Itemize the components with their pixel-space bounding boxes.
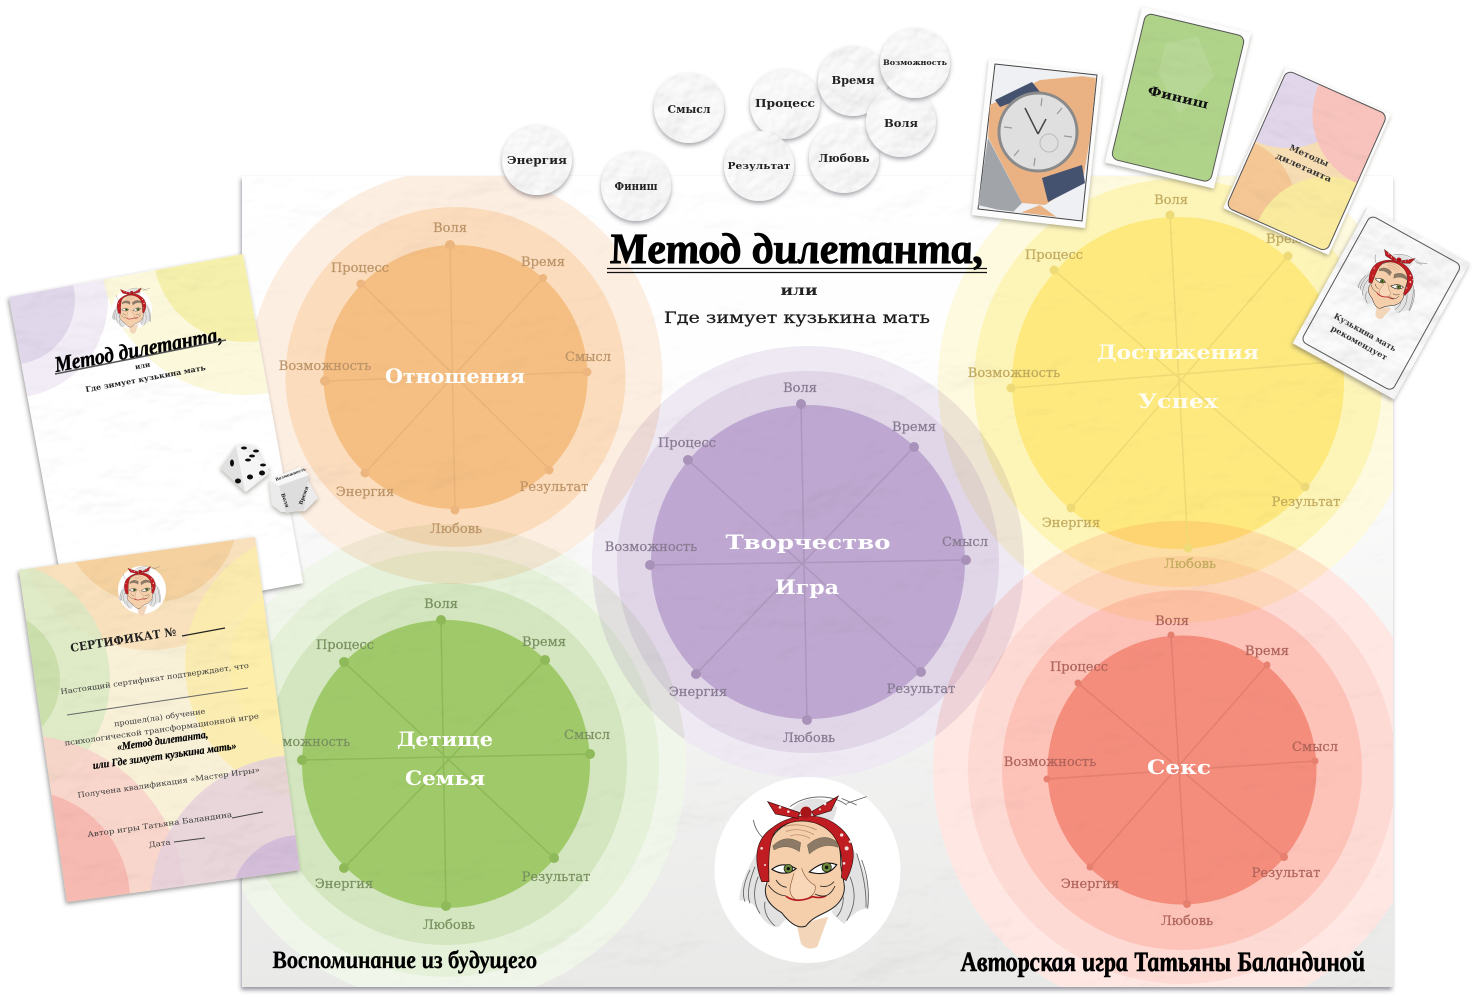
card: methods: Методы xyxy=(1288,143,1330,170)
wheel: Творчество Игра xyxy=(605,381,988,746)
wheel: Секс: Смысл xyxy=(1292,740,1338,755)
wheel: Отношения: Время xyxy=(521,255,565,270)
wheel: Детище Семья: Возможность xyxy=(258,735,350,750)
certificate body: или Где зимует кузькина мать» xyxy=(92,740,237,772)
game token: Смысл: Смысл xyxy=(668,102,710,116)
wheel: Творчество Игра: Смысл xyxy=(942,535,988,550)
certificate body: «Метод дилетанта, xyxy=(116,729,209,753)
game token: Возможность: Возможность xyxy=(883,58,947,67)
title: Где зимует кузькина мать xyxy=(664,308,930,327)
wheel: Творчество Игра: Энергия xyxy=(669,685,727,700)
dice: black pips xyxy=(220,444,270,492)
circle: creativity rings xyxy=(592,346,1024,778)
wheel: Отношения: Энергия xyxy=(336,485,394,500)
game token: Время: Время xyxy=(832,73,875,87)
wheel: Творчество Игра: Процесс xyxy=(658,436,716,451)
certificate portrait xyxy=(118,566,166,616)
footer text left: Воспоминание из будущего xyxy=(269,947,539,974)
dice: word faces: Возможность xyxy=(275,466,307,482)
title: или xyxy=(780,283,818,299)
game token: Процесс: Процесс xyxy=(755,96,815,110)
certificate body: Получена квалификация «Мастер Игры» xyxy=(77,765,261,800)
game token: Возможность xyxy=(880,28,950,98)
certificate body: Настоящий сертификат подтверждает, что xyxy=(60,661,250,696)
wheel: Достижения Успех: Любовь xyxy=(1164,557,1216,572)
wheel: Достижения Успех: Воля xyxy=(1154,193,1188,208)
wheel: Отношения: Смысл xyxy=(565,350,611,365)
wheel: Детище Семья: Детище xyxy=(397,728,493,751)
game token: Любовь xyxy=(809,123,879,193)
wheel: Детище Семья: Результат xyxy=(522,870,590,885)
wheel: Творчество Игра: Игра xyxy=(775,576,839,599)
certificate body: психологической трансформационной игре xyxy=(64,711,260,748)
game token: Процесс xyxy=(750,69,820,139)
game token: Время xyxy=(818,46,888,116)
booklet portrait xyxy=(112,288,152,334)
certificate xyxy=(16,536,302,906)
wheel: Детище Семья: Воля xyxy=(424,597,458,612)
wheel: Детище Семья: Смысл xyxy=(564,728,610,743)
booklet heading: или xyxy=(134,360,151,371)
wheel: Секс: Результат xyxy=(1252,866,1320,881)
certificate body: Автор игры Татьяна Баландина xyxy=(87,810,233,839)
wheel: Достижения Успех: Энергия xyxy=(1042,516,1100,531)
wheel: Секс: Любовь xyxy=(1161,914,1213,929)
wheel: Детище Семья: Процесс xyxy=(316,638,374,653)
certificate body xyxy=(60,661,263,850)
wheel: Достижения Успех: Время xyxy=(1266,232,1310,247)
game token: Любовь: Любовь xyxy=(818,151,870,165)
title: Метод дилетанта, xyxy=(605,225,986,273)
certificate body: Дата xyxy=(148,837,172,850)
game token: Воля xyxy=(866,87,936,157)
wheel: Творчество Игра: Возможность xyxy=(605,540,697,555)
wheel: Детище Семья: Любовь xyxy=(423,918,475,933)
card: Kuzkina mother recommends: Кузькина мать xyxy=(1332,311,1399,354)
card: finish xyxy=(1105,7,1251,189)
circle: sex rings xyxy=(933,521,1431,987)
wheel: Достижения Успех: Результат xyxy=(1272,495,1340,510)
wheel: Отношения: Воля xyxy=(433,221,467,236)
footer text right: Авторская игра Татьяны Баландиной xyxy=(957,947,1367,978)
rules booklet cover xyxy=(6,254,320,596)
game token: Энергия xyxy=(502,125,572,195)
wheel: Достижения Успех: Смысл xyxy=(1320,339,1366,354)
circle: relationships rings xyxy=(248,170,662,584)
wheel: Секс xyxy=(1004,614,1338,929)
booklet heading: Метод дилетанта, xyxy=(51,321,224,377)
certificate heading: СЕРТИФИКАТ № xyxy=(69,624,177,655)
wheel: Достижения Успех: Достижения xyxy=(1097,341,1259,364)
dice: word faces: Время xyxy=(298,486,310,506)
wheel: Достижения Успех xyxy=(968,193,1366,572)
game token: Результат: Результат xyxy=(728,161,791,172)
wheel: Достижения Успех: Успех xyxy=(1138,390,1218,413)
wheel: Детище Семья xyxy=(258,597,610,933)
booklet heading xyxy=(51,321,226,394)
game board xyxy=(206,143,1431,987)
game token: Воля: Воля xyxy=(884,116,918,130)
wheel: Секс: Процесс xyxy=(1050,660,1108,675)
wheel: Творчество Игра: Воля xyxy=(783,381,817,396)
certificate body: прошел(ла) обучение xyxy=(113,707,206,728)
game token: Энергия: Энергия xyxy=(507,153,568,167)
wheel: Достижения Успех: Процесс xyxy=(1025,248,1083,263)
card: Kuzkina mother recommends xyxy=(1293,207,1470,399)
wheel: Отношения: Отношения xyxy=(385,365,525,388)
title xyxy=(605,225,987,327)
wheel: Творчество Игра: Любовь xyxy=(783,731,835,746)
wheel: Детище Семья: Энергия xyxy=(315,877,373,892)
wheel: Детище Семья: Время xyxy=(522,635,566,650)
wheel: Детище Семья: Семья xyxy=(405,767,485,790)
dice: word faces xyxy=(269,466,318,513)
wheel: Отношения: Возможность xyxy=(279,359,371,374)
dice: word faces: Воля xyxy=(279,493,290,509)
wheel: Секс: Возможность xyxy=(1004,755,1096,770)
wheel: Секс: Энергия xyxy=(1061,877,1119,892)
wheel: Достижения Успех: Возможность xyxy=(968,366,1060,381)
card: wristwatch xyxy=(972,59,1102,228)
wheel: Творчество Игра: Время xyxy=(892,420,936,435)
circle: child/family rings xyxy=(206,524,686,987)
wheel: Отношения xyxy=(279,221,611,537)
wheel: Секс: Воля xyxy=(1155,614,1189,629)
game token: Финиш xyxy=(601,151,671,221)
game token: Смысл xyxy=(654,73,724,143)
wheel: Отношения: Процесс xyxy=(331,261,389,276)
card: finish: Финиш xyxy=(1146,83,1211,112)
game token: Результат xyxy=(724,131,794,201)
card: methods xyxy=(1221,68,1392,258)
card: methods: дилетанта xyxy=(1274,151,1333,185)
card: Kuzkina mother recommends: рекомендует xyxy=(1329,323,1389,362)
circle: achievement rings xyxy=(938,176,1393,623)
game token: Финиш: Финиш xyxy=(614,179,658,193)
wheel: Творчество Игра: Результат xyxy=(887,682,955,697)
booklet heading: Где зимует кузькина мать xyxy=(85,363,206,394)
wheel: Творчество Игра: Творчество xyxy=(726,531,890,554)
portrait: Kuzkina mother xyxy=(714,777,900,963)
wheel: Отношения: Результат xyxy=(520,480,588,495)
wheel: Секс: Время xyxy=(1245,644,1289,659)
wheel: Секс: Секс xyxy=(1147,756,1211,779)
wheel: Отношения: Любовь xyxy=(430,522,482,537)
